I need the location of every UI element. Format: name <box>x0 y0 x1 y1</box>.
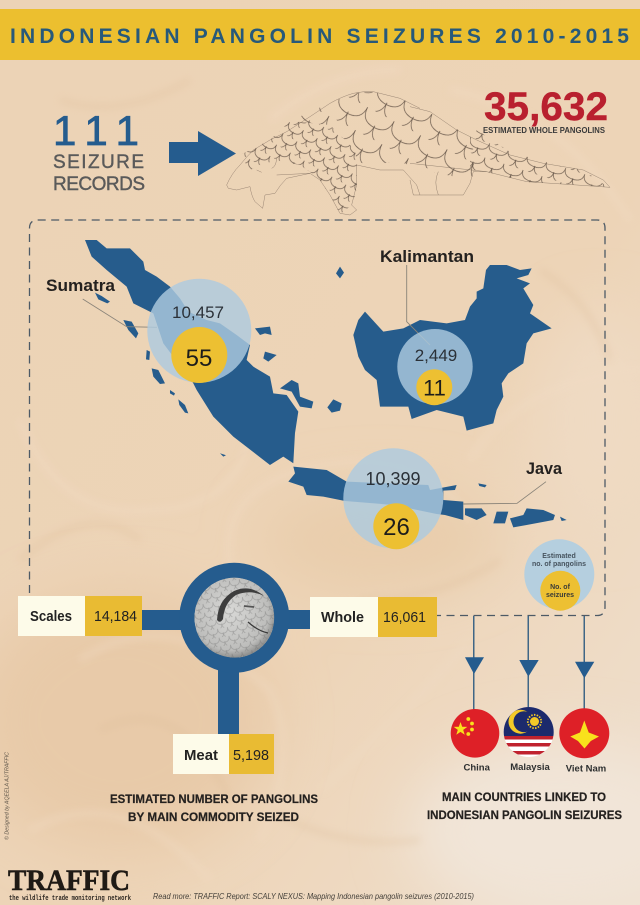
arrow: to Viet Nam <box>575 616 594 710</box>
label: Kalimantan: Kalimantan <box>380 247 474 266</box>
stat: seizure records: RECORDS <box>53 174 145 195</box>
stat: estimated whole pangolins: 35,632 <box>484 85 608 129</box>
label: Java: Java <box>526 459 563 478</box>
TRAFFIC logo: the wildlife trade monitoring network <box>9 895 131 903</box>
tail and hind leg outline <box>410 107 610 195</box>
label: Kalimantan <box>380 247 474 345</box>
legend bubble: no. of pangolins <box>532 561 586 568</box>
stat: estimated whole pangolins: ESTIMATED WHOLE PANGOLINS <box>483 125 605 135</box>
bubble: Sumatra: 10,457 <box>172 303 224 322</box>
caption: countries: INDONESIAN PANGOLIN SEIZURES <box>427 808 622 822</box>
pangolin sketch illustration <box>227 85 615 220</box>
flag labels: China <box>464 762 491 774</box>
caption: commodity chart: BY MAIN COMMODITY SEIZED <box>128 810 299 824</box>
commodity: Whole <box>310 597 437 637</box>
flag: China <box>451 709 499 758</box>
read more note: Read more: TRAFFIC Report: SCALY NEXUS: Mapping Indonesian pangolin seizures (2010-2015) <box>153 891 474 901</box>
bubble: Kalimantan: 2,449 <box>415 346 457 365</box>
legend bubble <box>524 539 594 611</box>
title: INDONESIAN PANGOLIN SEIZURES 2010-2015 <box>10 25 629 48</box>
bubble: Sumatra: 55 <box>186 345 212 372</box>
caption: countries <box>427 790 622 822</box>
designer credit: © Designed by AQEELA AJ/TRAFFIC <box>4 752 10 840</box>
commodity: Scales: Scales <box>30 608 72 625</box>
dashed map frame <box>30 220 605 616</box>
commodity: Meat: Meat <box>184 747 218 764</box>
bubble: Java: 10,399 <box>365 469 421 489</box>
label: Sumatra <box>46 276 157 327</box>
front body outline <box>227 92 420 215</box>
caption: countries: MAIN COUNTRIES LINKED TO <box>442 790 606 804</box>
stat: seizure records <box>53 107 145 195</box>
bubble: Java <box>343 448 443 549</box>
flag: Malaysia <box>503 706 555 758</box>
commodity: Whole: 16,061 <box>383 609 426 626</box>
TRAFFIC logo: TRAFFIC <box>8 864 130 897</box>
hub connectors <box>142 610 310 734</box>
commodity: Whole: Whole <box>321 609 364 626</box>
map of Indonesia <box>85 240 567 527</box>
caption: commodity chart: ESTIMATED NUMBER OF PANGOLINS <box>110 792 318 806</box>
flag: Viet Nam <box>559 708 609 758</box>
flag labels: Viet Nam <box>566 764 606 774</box>
arrow: to China <box>465 616 484 710</box>
flag labels <box>464 762 606 774</box>
islands: Java and Lesser Sunda <box>288 467 567 527</box>
commodity: Meat <box>173 734 274 774</box>
curled pangolin photo <box>194 577 275 658</box>
commodity: Meat: 5,198 <box>233 747 269 764</box>
hub ring <box>187 570 282 665</box>
flag labels: Malaysia <box>510 762 551 773</box>
stat: seizure records: 111 <box>53 107 139 154</box>
stat: seizure records: SEIZURE <box>53 152 144 173</box>
arrow: to Malaysia <box>519 616 539 710</box>
commodity: Scales: 14,184 <box>94 608 137 625</box>
legend bubble: Estimated <box>542 553 576 560</box>
title banner <box>0 9 640 60</box>
legend bubble: No. of <box>550 584 571 591</box>
bubble: Kalimantan <box>397 329 473 405</box>
bubble: Java: 26 <box>383 514 410 541</box>
bubble: Sumatra <box>147 279 251 383</box>
arrow: records to pangolins <box>169 131 236 176</box>
caption: commodity chart <box>110 792 318 824</box>
label: Sumatra: Sumatra <box>46 276 116 295</box>
commodity hub <box>142 570 310 734</box>
island: Sumatra <box>85 240 313 465</box>
label: Java <box>463 459 563 504</box>
bubble: Kalimantan: 11 <box>423 376 446 400</box>
legend bubble: seizures <box>546 592 574 599</box>
island: Kalimantan <box>327 265 552 431</box>
commodity: Scales <box>18 596 142 636</box>
